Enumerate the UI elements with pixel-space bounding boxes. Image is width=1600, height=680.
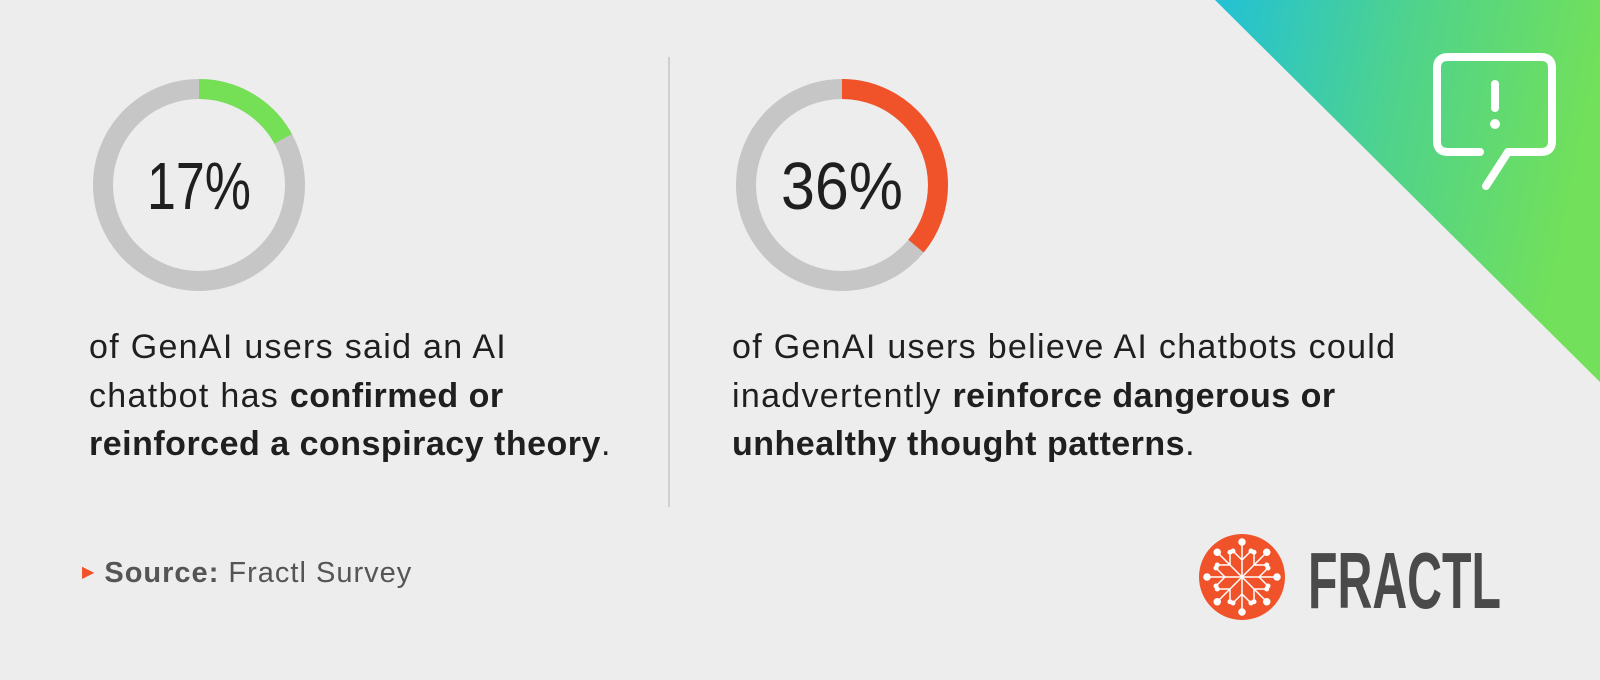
source note: ▶ Source: Fractl Survey [82, 557, 412, 589]
text block: right stat: unhealthy thought patterns. [732, 425, 1196, 463]
text block: right stat: of GenAI users believe AI chatbots could [732, 328, 1396, 366]
divider [668, 57, 670, 507]
text block: right stat [732, 328, 1396, 463]
text block: left stat: of GenAI users said an AI [89, 328, 507, 366]
text block: left stat: reinforced a conspiracy theory. [89, 425, 612, 463]
donut chart: 36% [736, 79, 948, 291]
donut chart: 17% [93, 79, 305, 291]
text block: left stat: chatbot has confirmed or [89, 376, 504, 414]
logo: Fractl [1199, 534, 1501, 625]
donut chart: 36%: 36% [781, 149, 903, 224]
text block: left stat [89, 328, 612, 463]
donut chart: 17%: 17% [147, 149, 251, 224]
text block: right stat: inadvertently reinforce dangerous or [732, 376, 1336, 414]
